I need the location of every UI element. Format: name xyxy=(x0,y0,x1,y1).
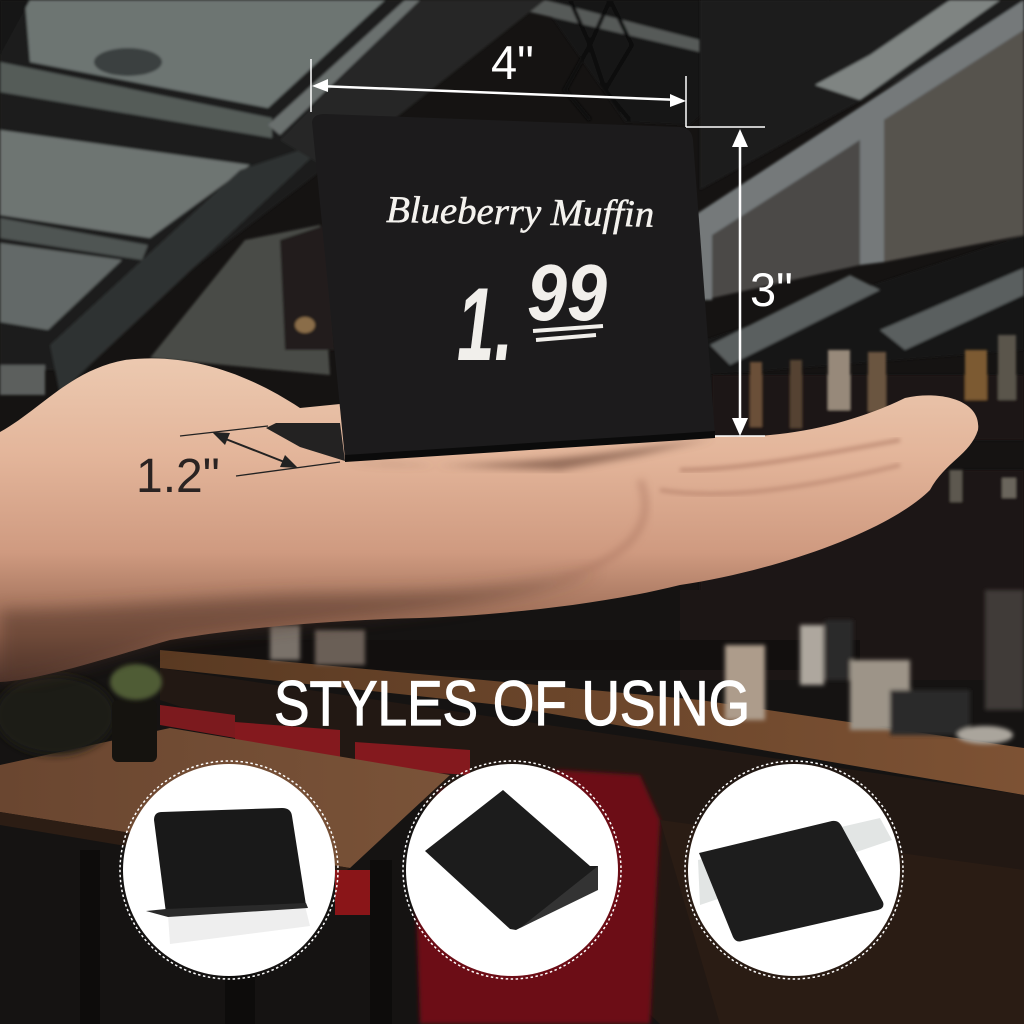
product: chalkboard sign xyxy=(266,114,715,462)
dining table and red chairs xyxy=(0,664,1024,1024)
panel: style 2 lying flat xyxy=(403,761,621,979)
hand xyxy=(0,358,978,682)
dimension: depth 1.2 inch: 1.2" xyxy=(136,450,220,503)
icon: clear tube xyxy=(698,818,892,905)
icon: standing sign xyxy=(146,808,310,944)
chalk text: product name: Blueberry Muffin xyxy=(386,189,655,236)
bar shelves and bottles xyxy=(700,335,1024,640)
chalk text: price: 1. xyxy=(457,267,513,383)
skylight glass panes xyxy=(0,0,830,395)
chalk text: price xyxy=(457,248,607,383)
dimension: depth 1.2 inch xyxy=(136,426,340,503)
dimension: height 3 inch xyxy=(686,127,793,436)
dimension: width 4 inch: 4" xyxy=(491,36,534,89)
heading: styles of using: STYLES OF USING xyxy=(274,669,750,739)
sign face xyxy=(312,114,715,459)
panel: style 1 standing xyxy=(120,761,338,979)
icon: flat sign xyxy=(699,821,883,942)
icon: tilted sign xyxy=(425,790,598,930)
dimension: height 3 inch: 3" xyxy=(750,263,793,316)
upper right windows xyxy=(695,0,1024,375)
dimension: width 4 inch xyxy=(311,36,686,127)
back bar counter with machines xyxy=(160,590,1024,1024)
sign foot xyxy=(266,423,345,461)
panel: style 3 taped to pipe xyxy=(685,761,903,979)
chalk text: price: 99 xyxy=(527,248,607,337)
